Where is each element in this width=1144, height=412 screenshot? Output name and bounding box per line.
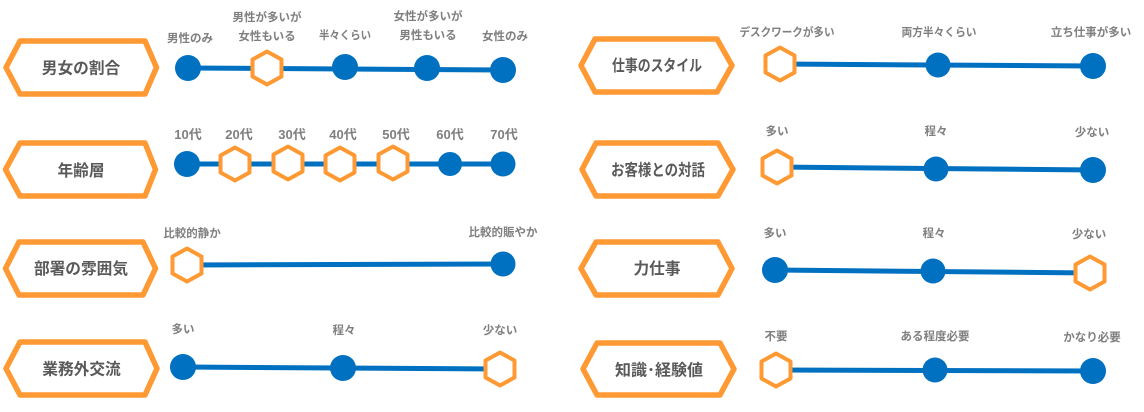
scale	[762, 124, 1109, 184]
scale	[170, 322, 517, 386]
heading banner: 力仕事	[633, 259, 681, 278]
scale: 50代	[382, 127, 410, 142]
scale: 多い	[766, 124, 788, 138]
scale: 立ち仕事が多い	[1051, 25, 1131, 39]
heading banner: 仕事のスタイル	[612, 56, 702, 75]
scale	[167, 9, 528, 84]
scale: 半々くらい	[319, 28, 371, 42]
scale	[174, 127, 518, 180]
heading banner: 業務外交流	[42, 360, 121, 378]
scale: 20代	[225, 127, 253, 142]
heading banner	[6, 242, 156, 295]
scale: かなり必要	[1063, 330, 1121, 344]
scale: 程々	[332, 323, 356, 337]
heading banner: 部署の雰囲気	[34, 259, 128, 278]
scale: 男性が多いが	[232, 10, 302, 24]
heading banner	[6, 41, 156, 94]
heading banner: お客様との対話	[611, 160, 705, 180]
scale: 少ない	[1072, 227, 1106, 241]
panel: 部署の雰囲気	[6, 225, 538, 295]
panel: 仕事のスタイル	[581, 25, 1131, 92]
scale: 70代	[490, 127, 518, 142]
scale	[762, 226, 1106, 290]
scale	[762, 329, 1121, 386]
heading banner: 年齢層	[57, 161, 105, 180]
heading banner	[6, 342, 157, 395]
heading banner	[582, 143, 733, 196]
scale: 少ない	[483, 323, 517, 337]
scale: 多い	[764, 226, 786, 240]
heading banner	[6, 143, 156, 196]
scale: 女性のみ	[482, 29, 528, 43]
panel: 年齢層	[6, 127, 518, 196]
scale: 女性が多いが	[394, 9, 463, 23]
scale: 不要	[764, 330, 788, 343]
panel: 知識・経験値	[583, 329, 1121, 395]
scale: ある程度必要	[900, 329, 970, 343]
scale: 40代	[329, 127, 357, 142]
scale: 男性もいる	[399, 28, 457, 42]
panel: お客様との対話	[582, 124, 1109, 196]
scale: 比較的賑やか	[468, 225, 538, 239]
scale: 程々	[922, 226, 946, 240]
heading banner	[581, 39, 732, 92]
scale: 10代	[174, 127, 202, 142]
scale: 60代	[436, 127, 464, 142]
scale: 30代	[278, 127, 306, 142]
heading banner: 知識･経験値	[615, 360, 703, 380]
scale: 女性もいる	[238, 29, 296, 43]
heading banner	[581, 242, 732, 295]
panel: 力仕事	[581, 226, 1106, 295]
heading banner: 男女の割合	[42, 60, 121, 78]
scale	[163, 225, 538, 282]
scale: 多い	[172, 322, 194, 336]
panel: 男女の割合	[6, 9, 528, 94]
scale: 少ない	[1075, 125, 1109, 139]
scale: 男性のみ	[167, 31, 213, 45]
scale: 比較的静か	[163, 226, 221, 240]
scale: 両方半々くらい	[902, 25, 976, 39]
panel: 業務外交流	[6, 322, 517, 395]
heading banner	[583, 343, 734, 395]
scale: デスクワークが多い	[740, 25, 834, 39]
scale: 程々	[924, 124, 948, 138]
scale	[740, 25, 1131, 80]
